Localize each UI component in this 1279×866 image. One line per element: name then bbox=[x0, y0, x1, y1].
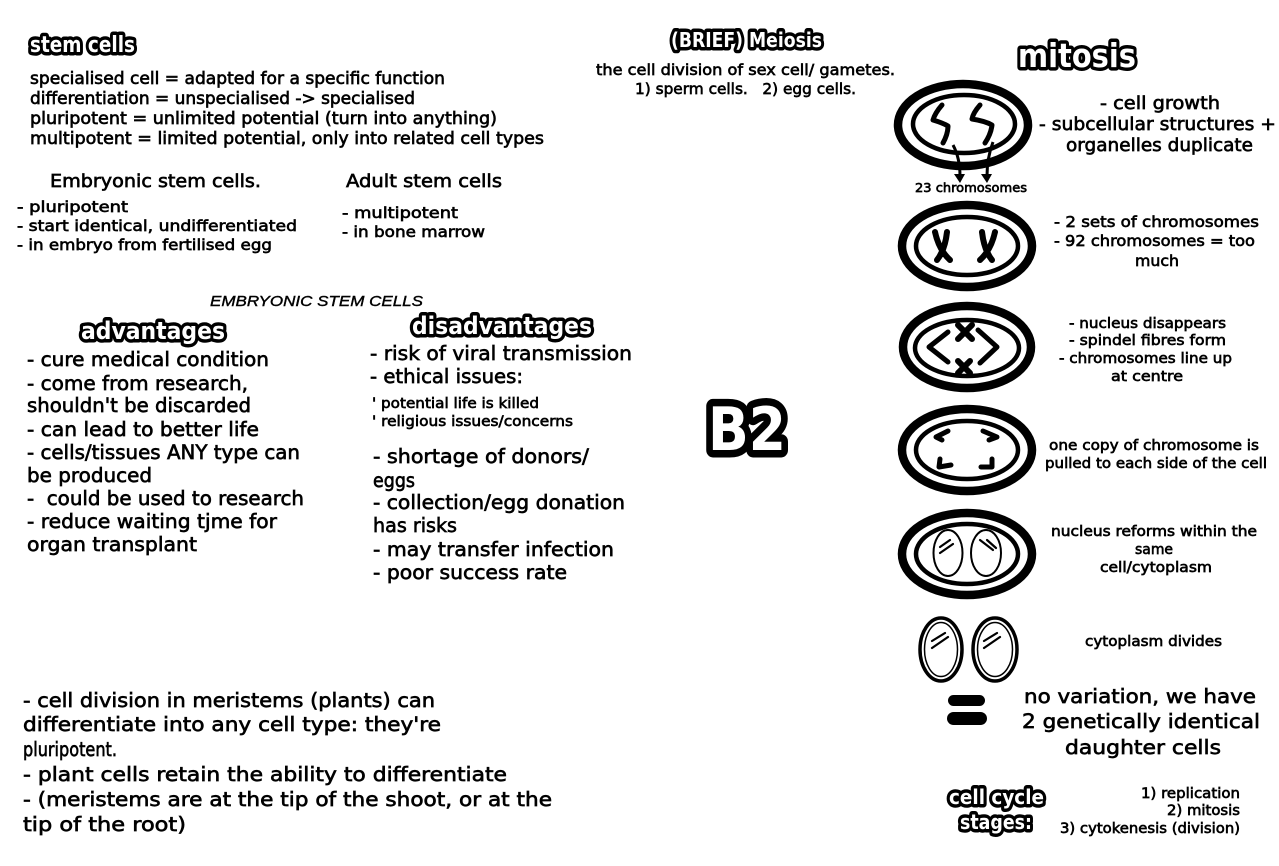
result text: no variation, we have bbox=[1024, 685, 1256, 708]
heading: cell cycle stages: cell cycle bbox=[949, 785, 1044, 809]
meiosis description bbox=[596, 61, 895, 98]
stage 3 text: - chromosomes line up bbox=[1059, 351, 1232, 367]
icon: cell with chromosomes bbox=[898, 84, 1028, 183]
stage 6 bbox=[920, 618, 1222, 681]
stage 5 text: same bbox=[1135, 542, 1173, 558]
embryonic stem cells list: - in embryo from fertilised egg bbox=[17, 236, 272, 254]
heading: brief meiosis: (BRIEF) Meiosis bbox=[671, 28, 822, 52]
stage 3 bbox=[903, 306, 1232, 388]
heading: disadvantages: disadvantages bbox=[412, 312, 592, 340]
stage 2 bbox=[902, 205, 1259, 287]
meiosis description: 1) sperm cells. 2) egg cells. bbox=[635, 80, 856, 98]
text block: plant meristems: differentiate into any cell type: they're bbox=[23, 713, 441, 736]
meiosis description: the cell division of sex cell/ gametes. bbox=[596, 61, 895, 79]
advantages list: - cure medical condition bbox=[27, 348, 269, 371]
embryonic stem cells list: - pluripotent bbox=[17, 198, 128, 216]
stage 6 text: cytoplasm divides bbox=[1085, 634, 1222, 650]
result text: daughter cells bbox=[1065, 736, 1221, 759]
text block: plant meristems: - plant cells retain the ability to differentiate bbox=[23, 763, 507, 786]
icon: cell with X chromosomes bbox=[902, 205, 1032, 287]
heading: cell cycle stages bbox=[949, 785, 1044, 834]
panel: cell cycle stages bbox=[949, 785, 1240, 837]
stage 3 text: at centre bbox=[1111, 369, 1183, 385]
stage 4 bbox=[902, 409, 1267, 491]
stage 1 text: - subcellular structures + bbox=[1039, 114, 1276, 135]
disadvantages list: - collection/egg donation bbox=[373, 491, 625, 514]
embryonic stem cells list: Embryonic stem cells. bbox=[50, 171, 261, 192]
embryonic stem cells list bbox=[17, 171, 297, 254]
stage 3 text bbox=[1059, 316, 1232, 385]
advantages list bbox=[27, 348, 304, 556]
advantages list: organ transplant bbox=[27, 533, 197, 556]
stage 1 text bbox=[1039, 93, 1276, 156]
advantages list: shouldn't be discarded bbox=[27, 394, 251, 417]
heading: cell cycle stages: stages: bbox=[960, 810, 1032, 834]
result text bbox=[1022, 685, 1260, 759]
stages list bbox=[1060, 786, 1240, 837]
heading: stem cells: stem cells bbox=[30, 33, 135, 58]
panel: meiosis bbox=[596, 28, 895, 98]
label: 23 chromosomes: 23 chromosomes bbox=[915, 180, 1027, 195]
stage 1 text: organelles duplicate bbox=[1066, 135, 1253, 156]
icon: chromosomes pulled apart bbox=[902, 409, 1032, 491]
advantages list: - can lead to better life bbox=[27, 418, 259, 441]
stages list: 3) cytokenesis (division) bbox=[1060, 821, 1240, 837]
text block: plant meristems: - cell division in meristems (plants) can bbox=[23, 689, 435, 712]
disadvantages list: - risk of viral transmission bbox=[370, 342, 632, 365]
disadvantages list: - shortage of donors/ bbox=[373, 445, 589, 468]
stage 2 text: - 92 chromosomes = too bbox=[1054, 232, 1255, 250]
stage 5 bbox=[902, 513, 1257, 595]
disadvantages list: ' religious issues/concerns bbox=[372, 414, 573, 430]
adult stem cells list: Adult stem cells bbox=[346, 171, 502, 192]
disadvantages list: - poor success rate bbox=[373, 561, 567, 584]
definitions text block: specialised cell = adapted for a specific function bbox=[30, 69, 445, 88]
stage 1 text: - cell growth bbox=[1100, 93, 1220, 114]
text block: plant meristems: - (meristems are at the tip of the shoot, or at the bbox=[23, 788, 552, 811]
stage 5 text: nucleus reforms within the bbox=[1051, 524, 1257, 540]
icon: equals sign bbox=[947, 695, 987, 725]
stages list: 1) replication bbox=[1141, 786, 1240, 802]
heading: embryonic stem cells: EMBRYONIC STEM CELLS bbox=[210, 293, 423, 310]
advantages list: - reduce waiting tjme for bbox=[27, 510, 278, 533]
adult stem cells list bbox=[342, 171, 502, 241]
disadvantages list: has risks bbox=[373, 514, 457, 537]
heading: mitosis: mitosis bbox=[1018, 36, 1136, 75]
text block: plant meristems: tip of the root) bbox=[23, 813, 186, 836]
stage 4 text: pulled to each side of the cell bbox=[1045, 456, 1267, 472]
icon: nucleus reforms bbox=[902, 513, 1032, 595]
panel: mitosis bbox=[898, 36, 1276, 837]
result text: 2 genetically identical bbox=[1022, 710, 1260, 733]
heading: advantages: advantages bbox=[81, 317, 225, 345]
stage 4 text: one copy of chromosome is bbox=[1049, 438, 1259, 454]
panel: embryonic stem cells pros and cons bbox=[27, 293, 632, 584]
advantages list: - come from research, bbox=[27, 372, 248, 395]
icon: two daughter cells bbox=[920, 618, 1017, 681]
text block: plant meristems bbox=[23, 689, 552, 836]
stage 2 text: - 2 sets of chromosomes bbox=[1054, 213, 1259, 231]
disadvantages list: ' potential life is killed bbox=[372, 396, 539, 412]
stage 5 text bbox=[1051, 524, 1257, 576]
panel: stem cells bbox=[17, 33, 544, 254]
advantages list: - cells/tissues ANY type can bbox=[27, 441, 300, 464]
stage 3 text: - spindel fibres form bbox=[1069, 333, 1226, 349]
icon: spindle fibres bbox=[903, 306, 1031, 388]
definitions text block: differentiation = unspecialised -> specialised bbox=[30, 89, 415, 108]
advantages list: be produced bbox=[27, 464, 152, 487]
disadvantages list bbox=[370, 342, 632, 584]
disadvantages list: - may transfer infection bbox=[373, 538, 614, 561]
stage 5 text: cell/cytoplasm bbox=[1100, 560, 1212, 576]
stage 1 bbox=[898, 84, 1276, 195]
stage 2 text bbox=[1054, 213, 1259, 270]
stages list: 2) mitosis bbox=[1167, 803, 1240, 819]
definitions text block: multipotent = limited potential, only into related cell types bbox=[30, 129, 544, 148]
embryonic stem cells list: - start identical, undifferentiated bbox=[17, 217, 297, 235]
stage 3 text: - nucleus disappears bbox=[1069, 316, 1226, 332]
text block: plant meristems: pluripotent. bbox=[23, 738, 117, 761]
title: B2: B2 bbox=[708, 395, 786, 465]
definitions text block: pluripotent = unlimited potential (turn into anything) bbox=[30, 109, 497, 128]
disadvantages list: eggs bbox=[373, 469, 415, 492]
adult stem cells list: - multipotent bbox=[342, 204, 458, 222]
disadvantages list: - ethical issues: bbox=[370, 365, 523, 388]
definitions text block bbox=[30, 69, 544, 148]
advantages list: - could be used to research bbox=[27, 487, 304, 510]
stage 4 text bbox=[1045, 438, 1267, 472]
adult stem cells list: - in bone marrow bbox=[342, 223, 485, 241]
stage 2 text: much bbox=[1135, 252, 1179, 270]
